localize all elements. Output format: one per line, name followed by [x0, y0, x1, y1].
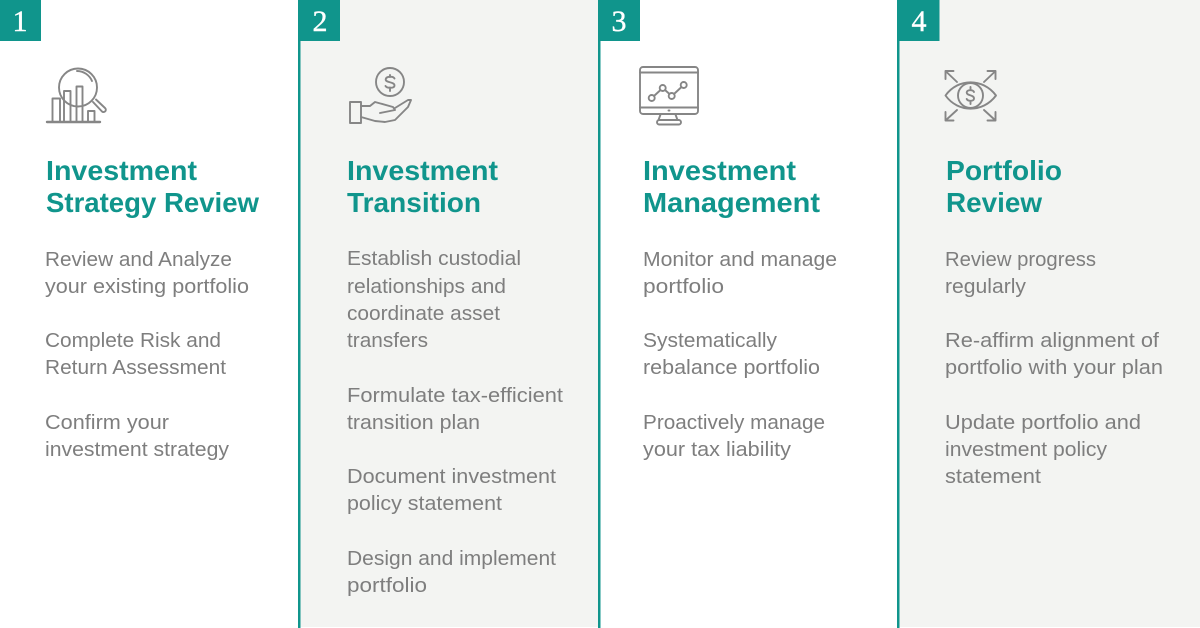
icon: hand holding dollar coin	[350, 68, 411, 123]
body text: transfers	[347, 329, 428, 352]
heading	[46, 155, 260, 218]
body text: regularly	[945, 275, 1027, 298]
body text: portfolio	[347, 574, 427, 597]
heading: Management	[643, 187, 820, 218]
body text: Review progress	[945, 248, 1096, 271]
body text: your existing portfolio	[45, 275, 249, 298]
body text: Review and Analyze	[45, 248, 232, 271]
body text: investment policy	[945, 438, 1108, 461]
panel: step 4 Portfolio Review	[897, 0, 1200, 628]
heading: Investment	[347, 155, 498, 186]
body text: statement	[945, 465, 1041, 488]
heading: Investment	[643, 155, 796, 186]
icon: magnifying glass over bar chart	[47, 68, 106, 122]
body text: Update portfolio and	[945, 411, 1141, 434]
heading: Review	[946, 187, 1043, 218]
body text: Complete Risk and	[45, 329, 221, 352]
heading: Transition	[347, 187, 481, 218]
number badge 4	[898, 0, 940, 41]
number badge 2	[298, 0, 340, 41]
body text	[643, 248, 837, 461]
body text: coordinate asset	[347, 302, 500, 325]
body text: relationships and	[347, 275, 506, 298]
body text: Formulate tax-efficient	[347, 384, 563, 407]
heading: Portfolio	[946, 155, 1062, 186]
number badge 3	[598, 0, 640, 41]
body text: your tax liability	[643, 438, 792, 461]
body text: Return Assessment	[45, 356, 226, 379]
panel: step 3 Investment Management	[598, 0, 897, 628]
heading	[946, 155, 1062, 218]
body text: portfolio with your plan	[945, 356, 1163, 379]
body text	[945, 248, 1163, 488]
icon: monitor with line chart	[640, 67, 698, 124]
heading: Strategy Review	[46, 187, 260, 218]
body text: Systematically	[643, 329, 778, 352]
body text	[347, 247, 563, 597]
number badge 2: 2	[312, 5, 328, 38]
body text: Document investment	[347, 465, 556, 488]
panel: step 2 Investment Transition	[298, 0, 598, 628]
number badge 1	[0, 0, 41, 41]
body text: Re-affirm alignment of	[945, 329, 1159, 352]
body text	[45, 248, 249, 461]
number badge 3: 3	[612, 5, 626, 38]
body text: Establish custodial	[347, 247, 521, 270]
panel: step 1 Investment Strategy Review	[0, 0, 298, 628]
body text: Monitor and manage	[643, 248, 837, 271]
body text: Design and implement	[347, 547, 556, 570]
body text: Proactively manage	[643, 411, 825, 434]
body text: policy statement	[347, 492, 502, 515]
body text: rebalance portfolio	[643, 356, 820, 379]
heading: Investment	[46, 155, 197, 186]
number badge 1: 1	[12, 5, 28, 38]
icon: eye with dollar and four arrows	[946, 71, 996, 120]
heading	[643, 155, 820, 218]
heading	[347, 155, 498, 218]
number badge 4: 4	[912, 5, 926, 38]
body text: transition plan	[347, 411, 480, 434]
body text: investment strategy	[45, 438, 230, 461]
body text: Confirm your	[45, 411, 169, 434]
body text: portfolio	[643, 275, 724, 298]
